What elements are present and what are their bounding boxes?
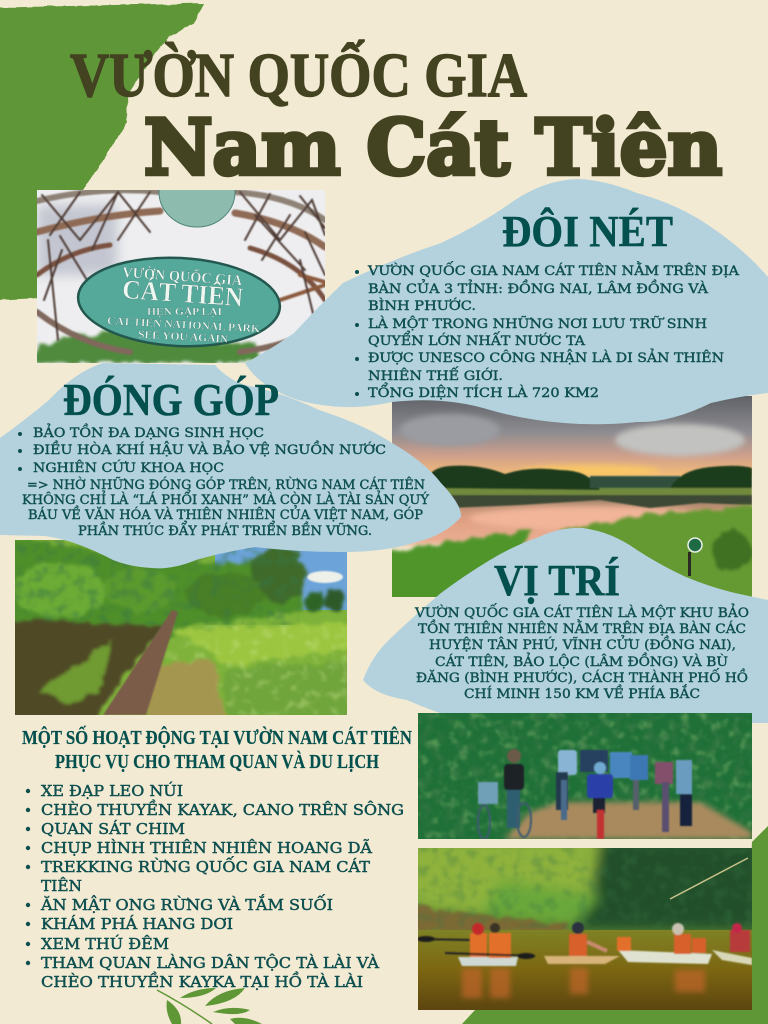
text block: vị trí: CÁT TIÊN, BẢO LỘC (LÂM ĐỒNG) VÀ BÙ [435, 652, 728, 670]
text block: đóng góp [18, 423, 429, 539]
photo: boardwalk through grassland [10, 535, 352, 720]
list: hoạt động: TREKKING RỪNG QUỐC GIA NAM CÁT [41, 856, 370, 876]
decorative green shape: bottom right [462, 826, 768, 1024]
list: hoạt động: THAM QUAN LÀNG DÂN TỘC TÀ LÀI VÀ [41, 954, 379, 972]
text block: đôi nét: TỔNG DIỆN TÍCH LÀ 720 KM2 [368, 382, 599, 401]
reflections [462, 968, 705, 998]
sign text: CÁT TIÊN [121, 274, 245, 312]
title line 2: Nam Cát Tiên [144, 103, 722, 192]
text block: đóng góp: BẢO TỒN ĐA DẠNG SINH HỌC [33, 423, 264, 441]
sign board [76, 253, 282, 351]
text block: đóng góp: ĐIỀU HÒA KHÍ HẬU VÀ BẢO VỆ NGUỒN NƯỚC [33, 440, 386, 458]
text block: vị trí [414, 603, 749, 702]
sign text [107, 263, 261, 346]
text block: đôi nét: ĐƯỢC UNESCO CÔNG NHẬN LÀ DI SẢN THIÊN [368, 348, 724, 366]
text block: đôi nét: NHIÊN THẾ GIỚI. [368, 366, 503, 384]
heading: đôi nét: ĐÔI NÉT [502, 207, 673, 256]
boardwalk [103, 610, 178, 715]
kayaks and paddlers [417, 922, 752, 966]
text block: đôi nét: BÌNH PHƯỚC. [368, 297, 476, 314]
photo: kayaking on the river [418, 848, 752, 1010]
heading: hoạt động [22, 725, 412, 773]
list: hoạt động: TIÊN [41, 877, 82, 895]
photo: cycling group [418, 713, 752, 839]
list: hoạt động: ĂN MẬT ONG RỪNG VÀ TẮM SUỐI [40, 894, 333, 914]
sign text: VƯỜN QUỐC GIA [122, 263, 243, 289]
panel: đóng góp background [0, 363, 461, 568]
heading: hoạt động: PHỤC VỤ CHO THAM QUAN VÀ DU LỊCH [55, 750, 379, 773]
text block: đóng góp: => NHỜ NHỮNG ĐÓNG GÓP TRÊN, RỪNG NAM CÁT TIÊN [27, 476, 425, 493]
globe [158, 190, 236, 228]
text block: đóng góp: KHÔNG CHỈ LÀ “LÁ PHỔI XANH” MÀ CÒN LÀ TÀI SẢN QUÝ [22, 489, 429, 508]
list: hoạt động: XEM THÚ ĐÊM [41, 935, 169, 953]
list: hoạt động: XE ĐẠP LEO NÚI [41, 782, 183, 800]
list: hoạt động: CHÈO THUYỀN KAYKA TẠI HỒ TÀ LÀI [41, 971, 363, 991]
text block: vị trí: ĐĂNG (BÌNH PHƯỚC), CÁCH THÀNH PHỐ HỒ [416, 668, 748, 686]
list: hoạt động [26, 782, 404, 991]
lattice arches [37, 190, 325, 352]
text block: đôi nét [355, 261, 739, 401]
text block: vị trí: TỒN THIÊN NHIÊN NẰM TRÊN ĐỊA BÀN CÁC [418, 619, 746, 637]
title [70, 41, 722, 192]
text block: vị trí: HUYỆN TÂN PHÚ, VĨNH CỬU (ĐỒNG NAI), [429, 635, 736, 653]
panel: vị trí background [363, 528, 768, 723]
text block: đóng góp: BÁU VỀ VĂN HÓA VÀ THIÊN NHIÊN CỦA VIỆT NAM, GÓP [28, 505, 423, 523]
icon: leaf branch [157, 988, 262, 1024]
decorative green shape: top left [0, 3, 204, 301]
photo: park entrance sign [37, 190, 325, 363]
sign text: SEE YOU AGAIN [138, 329, 228, 346]
cyclists [478, 749, 692, 839]
text block: đôi nét: VƯỜN QUỐC GIA NAM CÁT TIÊN NẰM TRÊN ĐỊA [367, 261, 739, 279]
title line 1: VƯỜN QUỐC GIA [70, 41, 527, 110]
heading: đóng góp: ĐÓNG GÓP [63, 374, 279, 425]
panel: đôi nét background [245, 179, 768, 424]
text block: vị trí: CHÍ MINH 150 KM VỀ PHÍA BẮC [464, 684, 700, 702]
photo: sunset lake [385, 396, 760, 605]
text block: đôi nét: LÀ MỘT TRONG NHỮNG NƠI LƯU TRỮ SINH [368, 316, 707, 332]
list: hoạt động: CHÈO THUYỀN KAYAK, CANO TRÊN SÔNG [41, 799, 404, 819]
text block: đôi nét: QUYỂN LỚN NHẤT NƯỚC TA [368, 331, 585, 349]
sign text: HẸN GẶP LẠI [147, 305, 222, 318]
list: hoạt động: CHỤP HÌNH THIÊN NHIÊN HOANG DÃ [41, 839, 372, 857]
text block: đóng góp: PHẦN THÚC ĐẨY PHÁT TRIỂN BỀN VỮNG. [78, 521, 372, 539]
bamboo pole [670, 858, 748, 899]
text block: đóng góp: NGHIÊN CỨU KHOA HỌC [33, 459, 224, 476]
trail marker [688, 538, 702, 576]
list: hoạt động: KHÁM PHÁ HANG DƠI [41, 915, 233, 933]
sign text: CAT TIEN NATIONAL PARK [107, 315, 261, 335]
text block: đôi nét: BÀN CỦA 3 TỈNH: ĐỒNG NAI, LÂM ĐỒNG VÀ [368, 279, 708, 297]
heading: hoạt động: MỘT SỐ HOẠT ĐỘNG TẠI VƯỜN NAM CÁT TIÊN [22, 725, 412, 749]
list: hoạt động: QUAN SÁT CHIM [41, 820, 185, 838]
text block: vị trí: VƯỜN QUỐC GIA CÁT TIÊN LÀ MỘT KHU BẢO [414, 603, 749, 621]
heading: vị trí: VỊ TRÍ [494, 556, 620, 605]
